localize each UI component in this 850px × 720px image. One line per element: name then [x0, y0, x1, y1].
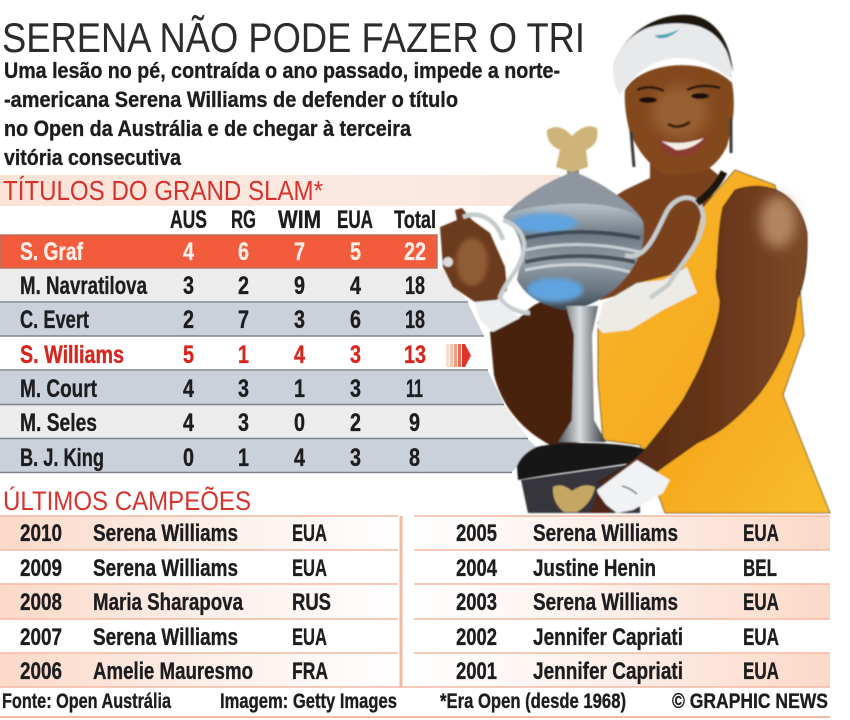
earrings [631, 118, 731, 167]
heading: recent champions: ÚLTIMOS CAMPEÕES [3, 485, 251, 516]
row: M. Court: 1 [294, 375, 305, 403]
heading band [0, 175, 560, 206]
list: 2005 to 2001: Jennifer Capriati [533, 624, 683, 651]
row: S. Williams: 13 [404, 341, 426, 369]
row: S. Graf: 4 [183, 238, 194, 266]
row: S. Graf: 7 [294, 238, 305, 266]
list: 2010 to 2006 [20, 520, 331, 685]
dress white panel [597, 267, 697, 333]
column headers: WIM [278, 206, 321, 234]
skin at wrist [590, 492, 612, 513]
row: B. J. King: 0 [183, 444, 194, 472]
right arm [597, 186, 807, 492]
arrow: S. Williams progress [446, 344, 471, 367]
row: C. Evert: 6 [350, 306, 361, 334]
list: 2005 to 2001 [456, 520, 779, 685]
list: 2010 to 2006: Amelie Mauresmo [93, 658, 253, 685]
neck and chest [600, 160, 722, 300]
row: S. Williams: S. Williams [20, 341, 124, 369]
ring [443, 257, 453, 267]
list: 2005 to 2001: Justine Henin [533, 555, 656, 582]
row: M. Court: M. Court [20, 375, 98, 403]
hand highlight [456, 238, 488, 286]
hand [440, 208, 507, 302]
panel: grand slam titles table [0, 175, 560, 472]
row: S. Williams: 5 [183, 341, 194, 369]
arm highlight [760, 196, 796, 248]
headband [613, 23, 732, 95]
intro text block: Uma lesão no pé, contraída o ano passado, impede a norte- [4, 58, 560, 83]
left forearm [490, 298, 582, 446]
list: 2010 to 2006: 2008 [20, 589, 62, 616]
row: S. Graf: 5 [350, 238, 361, 266]
row: M. Seles: 2 [350, 409, 361, 437]
trophy base [517, 443, 645, 513]
list: 2010 to 2006: 2007 [20, 624, 62, 651]
list: 2005 to 2001: EUA [743, 658, 779, 685]
list: 2005 to 2001: 2004 [456, 555, 498, 582]
list: 2010 to 2006: 2010 [20, 520, 62, 547]
row: M. Seles: 0 [294, 409, 305, 437]
footer credits: *Era Open (desde 1968) [440, 690, 626, 713]
row: B. J. King: B. J. King [20, 444, 104, 472]
column headers: Total [394, 206, 436, 234]
list: 2005 to 2001: 2001 [456, 658, 497, 685]
intro text block [4, 58, 560, 170]
trophy handles [463, 198, 703, 313]
row: M. Seles [0, 404, 528, 438]
row: M. Court: 3 [350, 375, 361, 403]
row: M. Navratilova: 9 [294, 272, 305, 300]
list: 2005 to 2001: BEL [743, 555, 777, 582]
intro text block: vitória consecutiva [4, 145, 182, 170]
row: M. Seles: 3 [238, 409, 249, 437]
row: B. J. King: 4 [294, 444, 305, 472]
row: S. Williams: 4 [294, 341, 305, 369]
list: 2010 to 2006: Maria Sharapova [93, 589, 244, 616]
row: B. J. King: 1 [238, 444, 249, 472]
trophy lid [503, 172, 643, 222]
row: C. Evert: 18 [405, 306, 425, 334]
list: 2010 to 2006: Serena Williams [93, 624, 238, 651]
headband logo [654, 29, 680, 38]
list: 2010 to 2006: EUA [292, 555, 327, 582]
list: 2010 to 2006: Serena Williams [93, 555, 238, 582]
column headers: RG [231, 206, 256, 234]
row: M. Court: 3 [238, 375, 249, 403]
column headers: EUA [337, 206, 373, 234]
row: S. Graf [0, 235, 437, 268]
list: 2005 to 2001: Jennifer Capriati [533, 658, 683, 685]
row: M. Navratilova: 18 [405, 272, 425, 300]
row: M. Seles: M. Seles [20, 409, 97, 437]
row: M. Navratilova: 3 [183, 272, 194, 300]
row: M. Court [0, 370, 504, 404]
face [625, 65, 734, 175]
trophy bowl [503, 198, 644, 310]
row: S. Graf: S. Graf [20, 238, 84, 266]
list: 2005 to 2001: 2003 [456, 589, 497, 616]
title: SERENA NÃO PODE FAZER O TRI [2, 14, 585, 61]
footer credits: Fonte: Open Austrália [2, 690, 171, 713]
list: 2005 to 2001: Serena Williams [533, 589, 678, 616]
row: M. Navratilova: 4 [350, 272, 361, 300]
panel: recent champions [0, 485, 830, 717]
row: M. Court: 4 [183, 375, 194, 403]
list: 2005 to 2001: 2005 [456, 520, 497, 547]
row: M. Seles: 9 [409, 409, 420, 437]
row: C. Evert: 3 [294, 306, 305, 334]
row: S. Graf: 6 [238, 238, 249, 266]
row: C. Evert: 7 [238, 306, 249, 334]
row: B. J. King: 3 [350, 444, 361, 472]
list: 2010 to 2006: EUA [292, 520, 327, 547]
right wristband [597, 460, 670, 513]
row: S. Williams: 1 [238, 341, 249, 369]
left wristband [475, 300, 520, 332]
row: C. Evert: 2 [183, 306, 194, 334]
list: 2005 to 2001: EUA [743, 624, 779, 651]
list: 2010 to 2006: RUS [292, 589, 331, 616]
row: S. Williams: 3 [350, 341, 361, 369]
photo: Serena Williams with trophy [440, 15, 830, 513]
column headers: AUS [170, 206, 207, 234]
row: B. J. King: 8 [409, 444, 420, 472]
row: M. Court: 11 [406, 375, 423, 403]
list: 2010 to 2006: 2009 [20, 555, 62, 582]
row: S. Graf: 22 [404, 238, 426, 266]
list: 2010 to 2006: FRA [292, 658, 328, 685]
row: C. Evert [0, 302, 484, 336]
trophy finial [547, 126, 598, 178]
footer credits [2, 690, 828, 713]
row: M. Seles: 4 [183, 409, 194, 437]
list: 2005 to 2001: 2002 [456, 624, 497, 651]
row: M. Navratilova [0, 269, 468, 302]
list: 2010 to 2006: Serena Williams [93, 520, 238, 547]
trophy stem [558, 306, 606, 442]
list: 2005 to 2001: EUA [743, 589, 779, 616]
hair [613, 15, 733, 72]
list: 2010 to 2006: EUA [292, 624, 327, 651]
row: B. J. King [0, 438, 536, 472]
intro text block: no Open da Austrália e de chegar à terceira [4, 116, 412, 141]
heading: titles: TÍTULOS DO GRAND SLAM* [3, 175, 323, 206]
row: C. Evert: C. Evert [20, 306, 89, 334]
dress [598, 170, 830, 513]
row: M. Navratilova: M. Navratilova [20, 272, 148, 300]
column headers [170, 206, 436, 234]
row shading [0, 516, 830, 717]
wristband logo [622, 486, 637, 494]
row: M. Navratilova: 2 [238, 272, 249, 300]
list: 2005 to 2001: Serena Williams [533, 520, 678, 547]
list: 2005 to 2001: EUA [743, 520, 779, 547]
choker [697, 172, 724, 203]
row: S. Williams [0, 336, 484, 369]
list: 2010 to 2006: 2006 [20, 658, 62, 685]
intro text block: -americana Serena Williams de defender o título [4, 87, 458, 112]
footer credits: Imagem: Getty Images [220, 690, 397, 713]
